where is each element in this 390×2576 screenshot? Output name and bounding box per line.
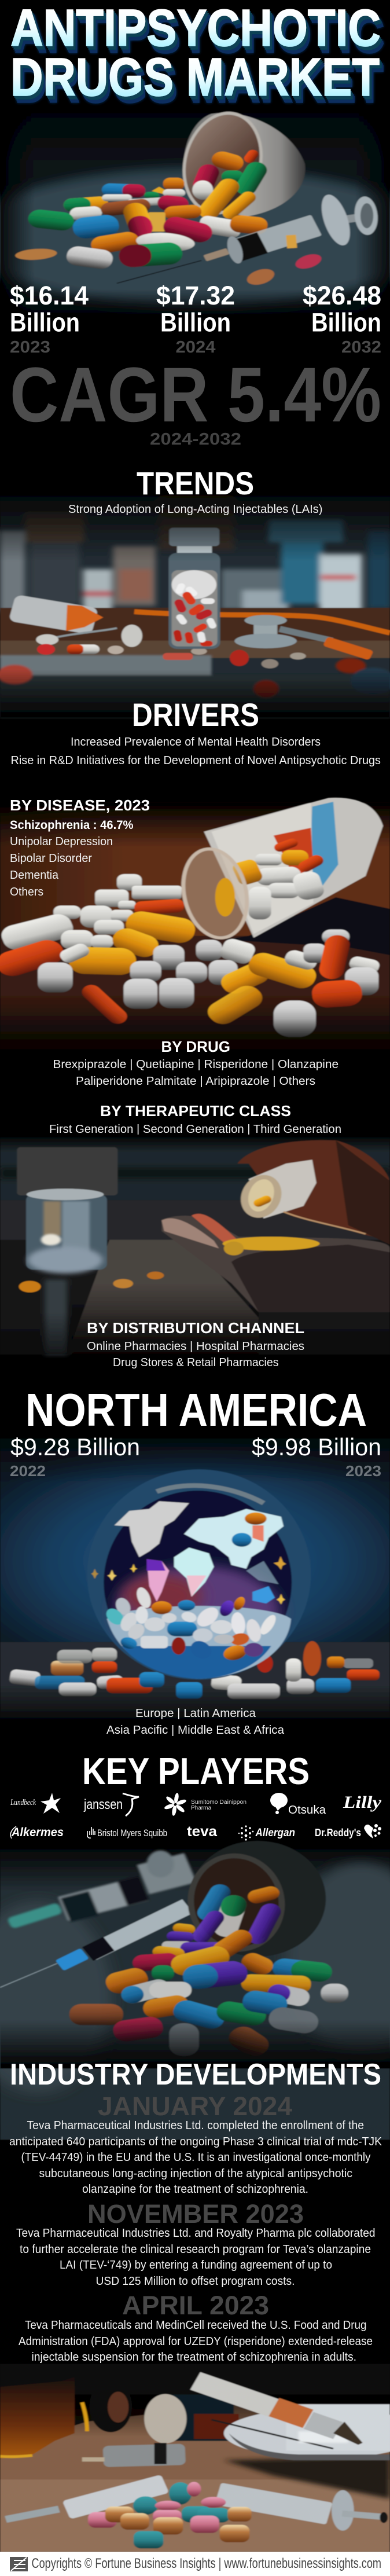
development: January 2024: Teva Pharmaceutical Industries Ltd. completed the enrollment of the bbox=[27, 2119, 364, 2132]
logo: Otsuka: Otsuka bbox=[288, 1804, 326, 1817]
logo: Janssen bbox=[83, 1793, 139, 1816]
segment: by therapeutic class: First Generation | Second Generation | Third Generation bbox=[49, 1122, 341, 1136]
segment: by disease: Unipolar Depression bbox=[10, 835, 113, 848]
segment: by distribution channel: Drug Stores & Retail Pharmacies bbox=[113, 1356, 279, 1369]
blurred shelf bottles bbox=[0, 492, 390, 614]
development: November 2023: USD 125 Million to offset program costs. bbox=[96, 2274, 295, 2288]
logo: Sumitomo Dainippon Pharma: Sumitomo Dainippon bbox=[191, 1799, 246, 1806]
colourful capsules bbox=[69, 1882, 348, 2061]
heading: drivers: Increased Prevalence of Mental Health Disorders bbox=[71, 735, 321, 748]
segment: by therapeutic class bbox=[49, 1102, 341, 1136]
cigarette bbox=[190, 2372, 363, 2445]
photo: hand with pills and water glass bbox=[0, 1135, 390, 1355]
logo: Dr. Reddy's: Dr.Reddy's bbox=[315, 1827, 361, 1839]
logo: Sumitomo Dainippon Pharma: Pharma bbox=[191, 1804, 211, 1811]
market value 2024: $17.32 bbox=[156, 281, 235, 310]
development: January 2024: (TEV-44749) in the EU and the U.S. It is an investigational once-monthly bbox=[21, 2151, 371, 2164]
segment: by disease: Dementia bbox=[10, 868, 59, 882]
development: November 2023 bbox=[16, 2199, 375, 2288]
north america 2022 value: $9.28 Billion bbox=[10, 1433, 140, 1461]
segment: by disease bbox=[10, 797, 150, 898]
segment: by distribution channel bbox=[87, 1319, 304, 1369]
heading: key players: KEY PLAYERS bbox=[82, 1750, 310, 1792]
world map continents bbox=[115, 1501, 284, 1603]
segment: by therapeutic class: BY THERAPEUTIC CLASS bbox=[100, 1102, 291, 1120]
heading: drivers: DRIVERS bbox=[132, 696, 259, 733]
segment: by disease: BY DISEASE, 2023 bbox=[10, 797, 150, 814]
segment: by drug: BY DRUG bbox=[161, 1038, 230, 1055]
market value 2023: Billion bbox=[10, 308, 80, 337]
dark tipped bottle bbox=[183, 1841, 326, 1957]
left syringe bbox=[5, 2475, 169, 2523]
market value 2023: $16.14 bbox=[10, 281, 89, 310]
development: November 2023: to further accelerate the clinical research program for Teva’s olanzapine bbox=[20, 2243, 371, 2256]
other regions: Europe | Latin America bbox=[135, 1707, 256, 1720]
glass vial of capsules bbox=[168, 528, 220, 649]
stethoscope bbox=[36, 612, 390, 660]
glass vial bbox=[82, 2443, 186, 2467]
segment: by drug: Paliperidone Palmitate | Aripiprazole | Others bbox=[76, 1074, 315, 1088]
footer bar bbox=[0, 2552, 390, 2576]
logo: Sumitomo Dainippon Pharma bbox=[164, 1793, 246, 1816]
white plate bbox=[211, 2404, 390, 2460]
development: January 2024: olanzapine for the treatment of schizophrenia. bbox=[82, 2182, 308, 2196]
orange-capped tube bbox=[9, 595, 103, 634]
logo: Dr. Reddy's bbox=[315, 1824, 381, 1839]
market value 2024: 2024 bbox=[176, 338, 215, 357]
blurred syringe bbox=[7, 1851, 197, 1929]
development: April 2023: Teva Pharmaceuticals and MedinCell received the U.S. Food and Drug bbox=[25, 2318, 367, 2332]
icon: Fortune Business Insights logo bbox=[10, 2557, 28, 2571]
stars and map pills bbox=[91, 1513, 286, 1605]
market value 2032: $26.48 bbox=[303, 281, 381, 310]
heading: drivers bbox=[10, 696, 381, 767]
wooden table bbox=[0, 608, 390, 656]
development: January 2024: JANUARY 2024 bbox=[98, 2091, 292, 2121]
logo: Otsuka bbox=[270, 1793, 326, 1817]
CAGR figure: 2024-2032 bbox=[150, 430, 241, 449]
logo: Teva: teva bbox=[187, 1823, 218, 1840]
spilled capsules bbox=[14, 148, 324, 288]
photo: pill bottle, capsules and syringe bbox=[0, 93, 390, 322]
water glass bbox=[17, 1147, 117, 1355]
north america 2022 value: 2022 bbox=[10, 1462, 46, 1480]
segment: by distribution channel: Online Pharmacies | Hospital Pharmacies bbox=[87, 1340, 304, 1353]
development: January 2024 bbox=[9, 2091, 382, 2196]
development: November 2023: NOVEMBER 2023 bbox=[87, 2199, 304, 2229]
logo: Lundbeck: Lundbeck bbox=[10, 1798, 36, 1807]
segment: by drug: Brexpiprazole | Quetiapine | Risperidone | Olanzapine bbox=[53, 1058, 339, 1071]
market value 2023: 2023 bbox=[10, 338, 50, 357]
amber bottle bbox=[0, 2377, 132, 2458]
development: April 2023: injectable suspension for the treatment of schizophrenia in adults. bbox=[31, 2350, 356, 2364]
bowl shaped bottle bbox=[174, 108, 306, 218]
segment: by disease: Schizophrenia : 46.7% bbox=[10, 819, 134, 832]
logo: Allergan: Allergan bbox=[255, 1827, 295, 1839]
photo: vial with pills and stethoscope bbox=[0, 486, 390, 718]
pills inside globe bbox=[103, 1586, 291, 1679]
other regions bbox=[106, 1707, 285, 1737]
other regions: Asia Pacific | Middle East & Africa bbox=[106, 1723, 285, 1737]
glass globe bbox=[87, 1469, 311, 1680]
loose pills bbox=[0, 874, 381, 1037]
right syringe bbox=[215, 2483, 388, 2531]
heading: trends: Strong Adoption of Long-Acting Injectables (LAIs) bbox=[68, 502, 323, 516]
hand and pill bottle bbox=[161, 1140, 390, 1312]
heading: trends: TRENDS bbox=[137, 465, 254, 501]
development: November 2023: LAI (TEV-‘749) by entering a funding agreement of up to bbox=[60, 2258, 332, 2272]
tipped pill bottle bbox=[176, 798, 383, 941]
market value 2032: 2032 bbox=[341, 338, 381, 357]
logo: Bristol Myers Squibb: Bristol Myers Squibb bbox=[97, 1828, 167, 1839]
logo: Bristol Myers Squibb bbox=[87, 1827, 167, 1839]
scattered pills bbox=[37, 644, 306, 669]
development: January 2024: subcutaneous long-acting injection of the atypical antipsychotic bbox=[39, 2167, 352, 2180]
north america 2022 value bbox=[10, 1433, 140, 1480]
segment: by disease: Bipolar Disorder bbox=[10, 852, 92, 865]
logo: Allergan bbox=[238, 1825, 295, 1841]
photo: glass globe with pills bbox=[0, 1439, 390, 1730]
title bbox=[10, 0, 381, 107]
market value 2032 bbox=[303, 281, 381, 357]
photo: syringe and colourful capsules bbox=[0, 1841, 390, 2140]
north america 2023 value bbox=[252, 1433, 381, 1480]
development: April 2023: APRIL 2023 bbox=[122, 2291, 269, 2320]
dark bottle on its side bbox=[144, 2394, 239, 2443]
logo: Lilly: Lilly bbox=[343, 1793, 382, 1812]
development: November 2023: Teva Pharmaceutical Industries Ltd. and Royalty Pharma plc collaborated bbox=[16, 2226, 375, 2240]
heading: drivers: Rise in R&D Initiatives for the Development of Novel Antipsychotic Drugs bbox=[10, 754, 381, 767]
photo: bottle, cigarette, syringes and tablets bbox=[0, 2364, 390, 2552]
market value 2024: Billion bbox=[160, 308, 231, 337]
market value 2023 bbox=[10, 281, 89, 357]
segment: by drug bbox=[53, 1038, 339, 1088]
pills on the floor bbox=[9, 1641, 380, 1699]
blurred foreground syringe bbox=[0, 655, 390, 718]
tablets bbox=[88, 2482, 252, 2548]
sharp syringe bbox=[0, 1899, 193, 1987]
logo: Alkermes: Alkermes bbox=[11, 1826, 64, 1839]
market value 2032: Billion bbox=[311, 308, 381, 337]
heading: trends bbox=[68, 465, 323, 516]
north america 2023 value: 2023 bbox=[345, 1462, 381, 1480]
segment: by disease: Others bbox=[10, 885, 43, 898]
logo: Lundbeck bbox=[10, 1793, 61, 1814]
segment: by distribution channel: BY DISTRIBUTION CHANNEL bbox=[87, 1319, 304, 1337]
logo: Janssen: janssen bbox=[83, 1797, 123, 1812]
syringe bbox=[117, 192, 379, 283]
north america 2023 value: $9.98 Billion bbox=[252, 1433, 381, 1461]
fallen capsules bbox=[19, 1272, 164, 1293]
photo: spilled white and yellow pills from bottle bbox=[0, 798, 390, 1065]
market value 2024 bbox=[156, 281, 235, 357]
development: April 2023 bbox=[19, 2291, 373, 2364]
